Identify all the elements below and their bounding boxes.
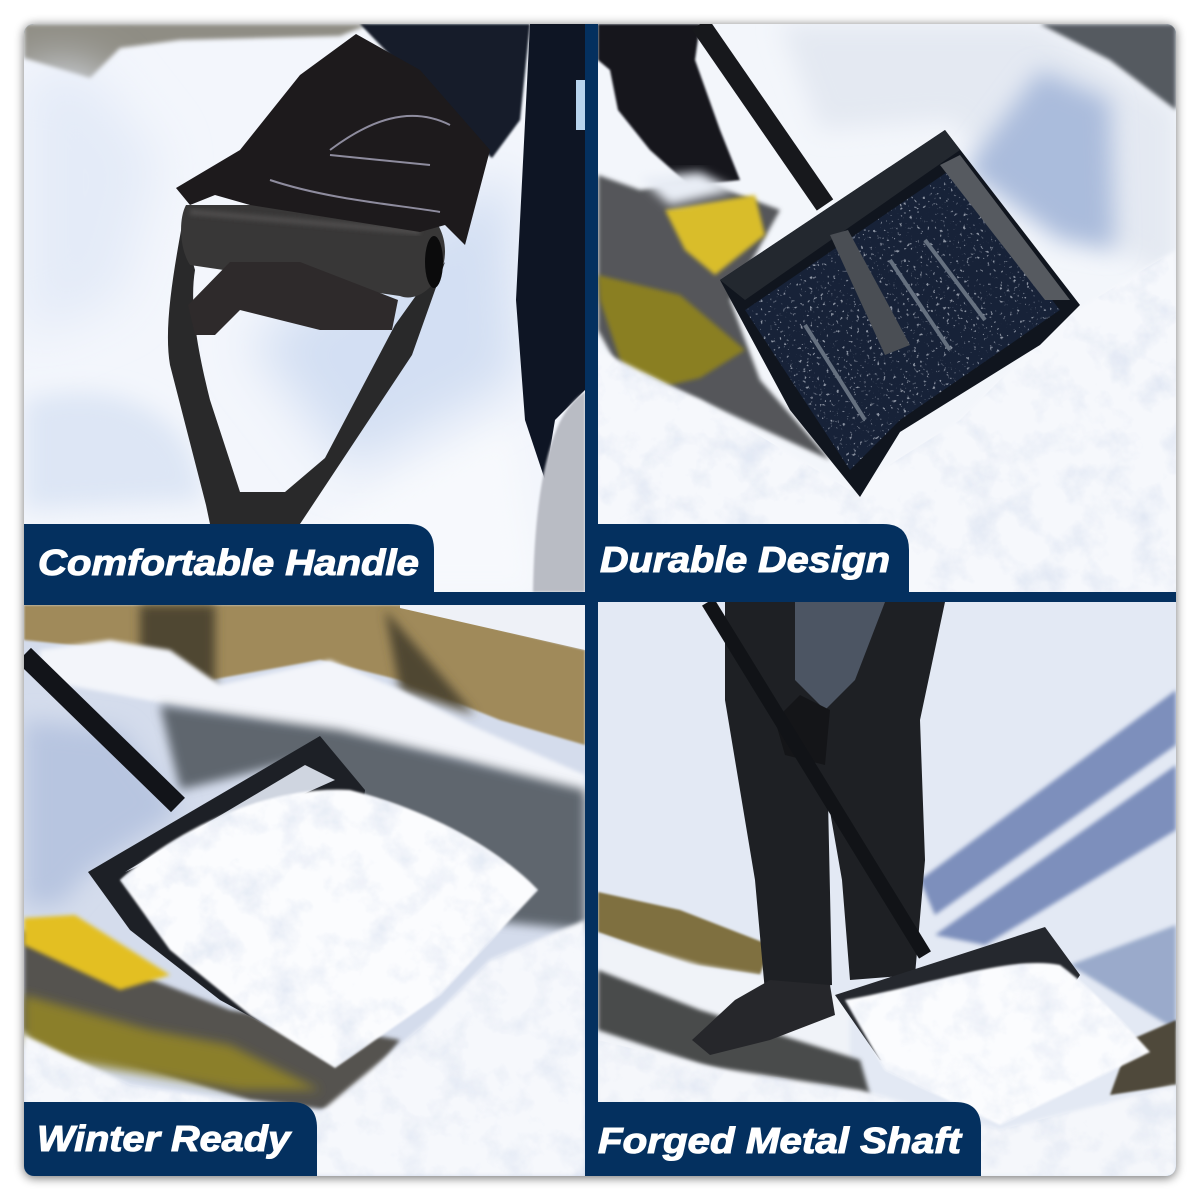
icon: shovel loaded with snow xyxy=(88,736,540,1070)
label: comfortable handle xyxy=(24,524,434,592)
label: forged metal shaft xyxy=(585,1102,981,1176)
label: durable design xyxy=(598,524,909,592)
label: winter ready xyxy=(24,1102,317,1176)
jacket sleeve xyxy=(360,24,530,158)
jacket body xyxy=(516,24,585,480)
pavement xyxy=(598,175,830,460)
vertical divider xyxy=(585,24,598,1176)
label: forged metal shaft: Forged Metal Shaft xyxy=(598,1120,963,1161)
jacket hem xyxy=(795,602,885,710)
wet road xyxy=(160,705,585,930)
shadowed snow xyxy=(780,24,1176,280)
person legs xyxy=(725,602,945,992)
panel: winter ready photo xyxy=(24,605,585,1176)
glove xyxy=(775,695,830,765)
panel: forged metal shaft photo xyxy=(598,602,1176,1176)
label: durable design: Durable Design xyxy=(600,539,890,580)
icon: glove xyxy=(176,34,490,335)
distant pavement strip xyxy=(24,24,370,78)
foreground snow xyxy=(24,920,585,1176)
curb xyxy=(24,605,585,745)
shaft xyxy=(700,24,825,205)
icon: shovel loaded with snow xyxy=(835,927,1150,1125)
yellow curb paint and pavement xyxy=(24,930,400,1112)
shoe xyxy=(692,980,835,1055)
icon: handle frame xyxy=(168,205,445,524)
label: winter ready: Winter Ready xyxy=(37,1118,292,1159)
curb snow xyxy=(40,640,585,800)
lower snow and road xyxy=(599,933,849,1058)
icon: shovel blade xyxy=(720,130,1080,500)
panel: durable design photo xyxy=(598,24,1176,592)
long shadows on snow xyxy=(920,690,1176,915)
snow foreground xyxy=(608,254,1174,414)
horizontal divider xyxy=(24,592,1176,602)
curb xyxy=(598,892,770,975)
panel: comfortable handle photo xyxy=(24,24,585,592)
shaft xyxy=(708,602,925,955)
label: comfortable handle: Comfortable Handle xyxy=(38,542,419,583)
left snow xyxy=(24,720,180,905)
boot xyxy=(598,24,740,186)
shaft xyxy=(24,655,178,805)
